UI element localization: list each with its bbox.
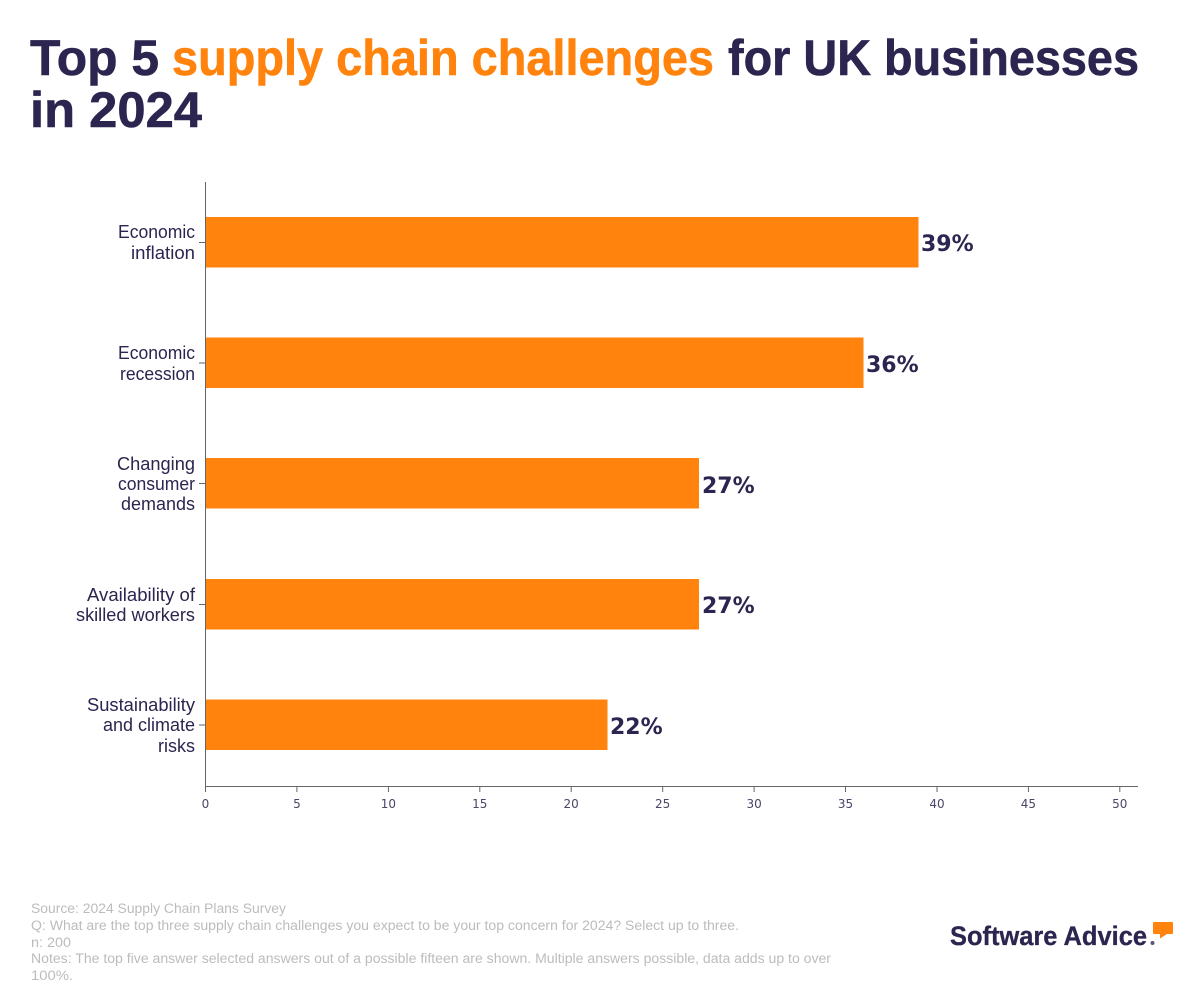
bar: Sustainability and climate risks 22%: 22% bbox=[610, 715, 663, 740]
logo: Software Advice: Software Advice bbox=[950, 921, 1147, 951]
source notes: Source: 2024 Supply Chain Plans Survey bbox=[31, 901, 286, 916]
x axis ticks and labels: 15 bbox=[472, 797, 487, 811]
x axis ticks and labels: 50 bbox=[1112, 797, 1127, 811]
title bbox=[30, 30, 1139, 138]
bar: Economic inflation 39%: Economic bbox=[118, 222, 195, 242]
source notes: 100%. bbox=[31, 968, 73, 983]
bar: Economic recession 36%: recession bbox=[120, 364, 195, 384]
bar: Availability of skilled workers 27%: Availability of bbox=[87, 585, 196, 605]
x axis ticks and labels: 25 bbox=[655, 797, 670, 811]
bar: Sustainability and climate risks 22%: risks bbox=[158, 736, 195, 756]
source notes: Q: What are the top three supply chain challenges you expect to be your top concern for 2024? Select up to three. bbox=[31, 918, 739, 933]
source notes: n: 200 bbox=[31, 935, 71, 950]
bar: Economic recession 36% bbox=[118, 338, 919, 388]
x axis ticks and labels: 45 bbox=[1021, 797, 1036, 811]
x axis ticks and labels: 40 bbox=[929, 797, 945, 811]
source notes: Notes: The top five answer selected answers out of a possible fifteen are shown. Multiple answers possible, data adds up to over bbox=[31, 951, 832, 966]
source notes bbox=[31, 901, 832, 983]
bar: Changing consumer demands 27% bbox=[117, 454, 755, 514]
title: Top 5 bbox=[30, 30, 159, 86]
bar: Sustainability and climate risks 22%: and climate bbox=[103, 715, 195, 735]
bar: Availability of skilled workers 27%: 27% bbox=[702, 594, 755, 619]
x axis ticks and labels: 0 bbox=[202, 797, 209, 811]
axes bbox=[199, 182, 1138, 786]
bar: Availability of skilled workers 27%: skilled workers bbox=[76, 605, 195, 625]
bar: Economic recession 36%: Economic bbox=[118, 343, 195, 363]
bar: Economic inflation 39% bbox=[118, 217, 974, 268]
x axis ticks and labels: 5 bbox=[293, 797, 301, 811]
icon: speech bubble bbox=[1153, 922, 1173, 938]
bar: Changing consumer demands 27%: Changing bbox=[117, 454, 195, 474]
x axis ticks and labels bbox=[202, 786, 1127, 811]
bar: Economic inflation 39%: 39% bbox=[921, 232, 974, 257]
x axis ticks and labels: 20 bbox=[564, 797, 579, 811]
bar: Changing consumer demands 27%: 27% bbox=[702, 474, 755, 499]
bar: Changing consumer demands 27%: consumer bbox=[118, 474, 195, 494]
bar: Availability of skilled workers 27% bbox=[76, 579, 755, 630]
x axis ticks and labels: 10 bbox=[381, 797, 396, 811]
bar: Changing consumer demands 27%: demands bbox=[121, 494, 195, 514]
bar chart bbox=[76, 182, 1138, 811]
x axis ticks and labels: 30 bbox=[746, 797, 762, 811]
bar: Economic recession 36%: 36% bbox=[866, 353, 919, 378]
x axis ticks and labels: 35 bbox=[838, 797, 853, 811]
title: supply chain challenges bbox=[172, 30, 714, 86]
bar: Sustainability and climate risks 22%: Sustainability bbox=[87, 695, 195, 715]
bar: Sustainability and climate risks 22% bbox=[87, 695, 663, 756]
title: for UK businesses bbox=[728, 30, 1139, 86]
bar: Economic inflation 39%: inflation bbox=[131, 243, 195, 263]
title: in 2024 bbox=[30, 82, 202, 138]
